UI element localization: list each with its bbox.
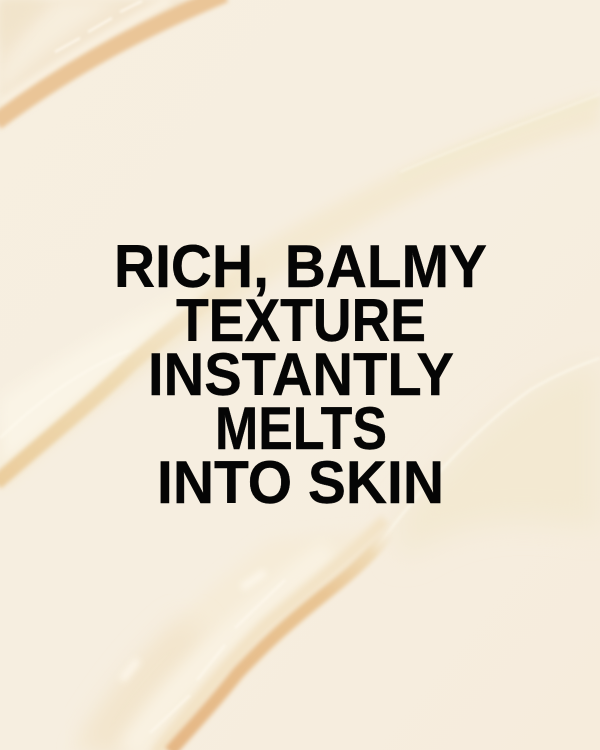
bottom fold — [70, 358, 600, 750]
headline: RICH, BALMY — [114, 233, 487, 300]
headline: TEXTURE — [176, 287, 426, 354]
headline: INSTANTLY — [148, 341, 454, 408]
headline: MELTS — [215, 395, 387, 462]
headline: INTO SKIN — [157, 449, 444, 516]
top-left fold — [0, 0, 225, 125]
headline — [114, 233, 487, 516]
middle fold — [0, 94, 600, 490]
